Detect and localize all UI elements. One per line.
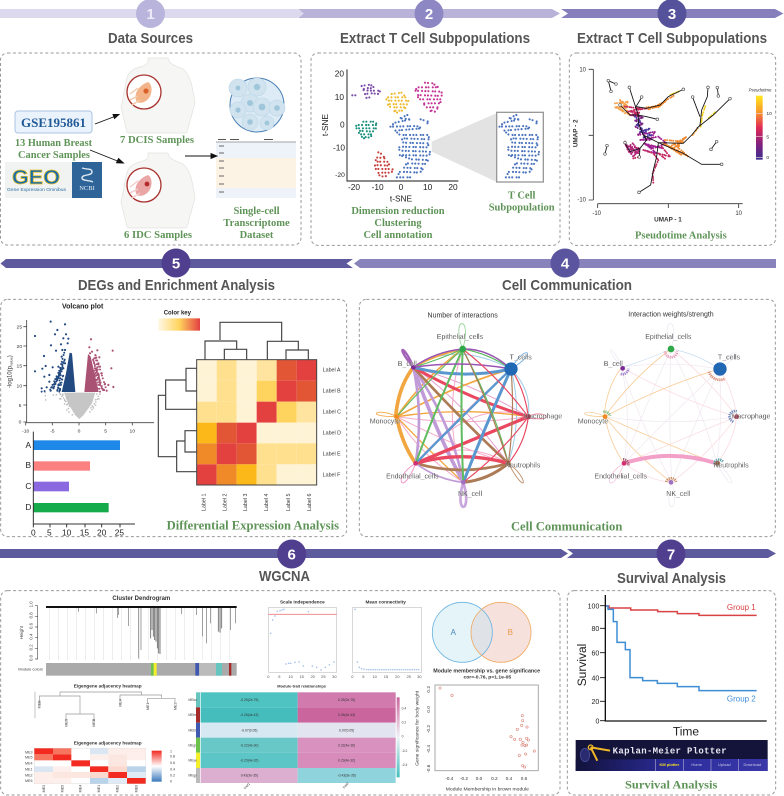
network: number of interactions: Epithelial_cells <box>437 334 484 341</box>
step badge 1 <box>136 0 165 28</box>
step badge 2 <box>414 0 444 28</box>
chart: mean connectivity: Mean connectivity <box>365 600 406 605</box>
cluster dendrogram: 0.6 <box>29 622 34 629</box>
heatmap: Label 6 <box>307 493 313 511</box>
chart: mean connectivity: 5 <box>362 674 365 679</box>
eigengene adjacency heatmap: ME2 <box>116 785 120 792</box>
volcano plot: 5 <box>104 428 107 434</box>
zoom wedge <box>432 113 496 182</box>
module-trait relationships heatmap: 0.26(4e-43) <box>338 713 355 717</box>
module membership scatter plot: -0.4 <box>445 776 454 781</box>
eigengene adjacency heatmap: 0.4 <box>170 767 175 771</box>
Kaplan-Meier Plotter banner: Download <box>743 762 761 767</box>
heatmap: Label 1 <box>202 493 208 511</box>
volcano plot: ) <box>7 355 13 357</box>
t-SNE axes: t-SNE <box>390 193 413 203</box>
arrows between data source and samples <box>90 114 217 163</box>
panel: t-SNE clustering <box>311 53 560 245</box>
heatmap: Label A <box>323 367 341 373</box>
Kaplan-Meier curves: 80 <box>592 626 599 633</box>
chart: scale independence: 0 <box>267 674 270 679</box>
pseudotime cells <box>615 92 715 183</box>
UMAP axes: -10 <box>577 197 587 203</box>
cluster dendrogram: 0.2 <box>29 644 34 650</box>
chart: scale independence: Scale independence <box>280 600 325 605</box>
t-SNE axes: -20 <box>335 172 345 179</box>
network: interaction weights and strength: Interaction weights/strength <box>628 312 714 319</box>
t-SNE axes: 20 <box>448 182 458 192</box>
step badge 4 <box>550 248 580 278</box>
module membership scatter plot: Module membership vs. gene significance <box>433 668 540 674</box>
module-trait relationships heatmap: -0.25(2e-75) <box>240 698 258 702</box>
module-trait relationships heatmap: -0.07(0.05) <box>241 728 257 732</box>
module membership scatter plot: 0.0 <box>426 706 431 713</box>
label: dimension reduction, clustering, cell annotation: Dimension reduction <box>351 206 445 217</box>
step badge 4: 4 <box>561 256 570 272</box>
eigengene adjacency heatmap: ME4 <box>79 785 83 792</box>
t-SNE axes: -20 <box>348 182 360 192</box>
bar chart: 25 <box>115 527 124 537</box>
panel: survival analysis <box>567 591 776 795</box>
Kaplan-Meier curves: 0 <box>595 718 599 725</box>
volcano plot: 20 <box>17 344 22 350</box>
icon: cell culture dish <box>229 78 285 132</box>
label: differential expression analysis: Differential Expression Analysis <box>167 518 339 532</box>
network: number of interactions: Macrophage <box>523 414 562 421</box>
eigengene adjacency heatmap: 0.8 <box>170 755 175 759</box>
heading: WGCNA: WGCNA <box>259 568 310 585</box>
label: T cell subpopulation: T Cell <box>508 190 535 201</box>
chart: scale independence: 20 <box>310 674 316 679</box>
label: survival analysis: Survival Analysis <box>625 778 718 792</box>
t-SNE axes: 0 <box>399 182 404 192</box>
network: number of interactions: NK_cell <box>458 491 482 498</box>
chart: mean connectivity: 25 <box>406 674 412 679</box>
bar chart: 5 <box>47 527 52 537</box>
step badge 7: 7 <box>667 546 675 564</box>
Kaplan-Meier curves: 100 <box>588 603 599 610</box>
heading: Data Sources: Data Sources <box>108 30 193 47</box>
cluster dendrogram: 0.0 <box>29 654 34 661</box>
pseudotime colour bar: Pseudotime <box>749 87 772 92</box>
eigengene adjacency heatmap: ME4 <box>25 761 33 765</box>
label: 7 DCIS samples: 7 DCIS Samples <box>120 135 194 146</box>
network: number of interactions: Monocyte <box>370 419 400 426</box>
eigengene adjacency heatmap: ME1 <box>97 785 101 792</box>
cluster dendrogram: 1.0 <box>29 601 34 607</box>
heading: DEGs and enrichment analysis: DEGs and Enrichment Analysis <box>78 277 275 294</box>
eigengene adjacency heatmap: 0.6 <box>170 761 175 765</box>
chart: mean connectivity <box>351 600 422 679</box>
network: number of interactions <box>370 313 562 507</box>
module membership scatter plot: Gene significance for body weight <box>415 690 421 766</box>
label: single-cell transcriptome dataset: Dataset <box>240 230 274 241</box>
bar chart: 0 <box>31 527 36 537</box>
step banner row 2 <box>0 259 776 268</box>
heatmap: Label 3 <box>243 493 249 511</box>
module membership scatter plot: -0.2 <box>426 725 431 733</box>
data source box: GSE195861 <box>15 111 92 133</box>
trajectory graph <box>605 81 730 192</box>
eigengene dendrogram: Eigengene adjacency heatmap <box>74 683 142 688</box>
bar chart: B <box>26 460 32 470</box>
volcano plot: value <box>9 357 13 366</box>
network: interaction weights and strength: Epithelial_cells <box>645 334 692 341</box>
pseudotime colour bar <box>749 87 772 161</box>
heatmap: Label 2 <box>222 493 228 511</box>
step badge 5: 5 <box>172 256 180 272</box>
volcano plot: 0 <box>78 428 81 434</box>
chart: mean connectivity: 30 <box>417 674 422 679</box>
module-trait relationships heatmap: MEbl <box>188 728 196 732</box>
chart: scale independence: 5 <box>278 674 281 679</box>
venn diagram <box>432 602 531 662</box>
volcano plot: 15 <box>17 364 22 370</box>
panel: cell communication <box>359 299 775 537</box>
module-trait relationships heatmap: -0.23(4e-32) <box>240 758 258 762</box>
network: interaction weights and strength: Endothelial_cells <box>594 473 647 480</box>
label: 13 human breast cancer samples: 13 Human Breast <box>15 138 92 149</box>
bar chart: 10 <box>62 527 72 537</box>
pseudotime colour bar: 5 <box>766 134 769 140</box>
chart: mean connectivity: 20 <box>395 674 400 679</box>
chart: mean connectivity: 10 <box>372 674 378 679</box>
t-SNE clusters <box>352 83 442 177</box>
module-trait relationships heatmap: 0 <box>402 735 404 739</box>
eigengene dendrogram <box>35 683 177 727</box>
module membership scatter plot: 0.0 <box>476 776 483 781</box>
UMAP axes: 10 <box>579 67 587 73</box>
module-trait relationships heatmap: -0.22(4e-30) <box>240 743 258 747</box>
cluster dendrogram: 0.8 <box>29 612 34 618</box>
Kaplan-Meier curves <box>575 595 767 738</box>
pseudotime colour bar: 10 <box>766 111 772 117</box>
heatmap: Label C <box>323 409 341 415</box>
module-trait relationships heatmap: -0.26(4e-43) <box>240 713 258 717</box>
volcano plot: Volcano plot <box>62 304 104 311</box>
module-trait relationships heatmap: -0.43(3e-35) <box>337 773 356 777</box>
step badge 7 <box>656 540 686 568</box>
module membership scatter plot: 0.2 <box>491 776 498 781</box>
network: interaction weights and strength: T_cells <box>718 354 741 361</box>
step banner row 3 <box>0 549 776 558</box>
module-trait relationships heatmap: 0.07(0.05) <box>339 728 354 732</box>
module membership scatter plot: 0.6 <box>521 776 528 781</box>
heatmap: Label 5 <box>286 493 292 511</box>
chart: scale independence: 25 <box>321 674 326 679</box>
Kaplan-Meier curves: 60 <box>592 650 599 657</box>
label: pseudotime analysis: Pseudotime Analysis <box>635 230 727 241</box>
eigengene adjacency heatmap: 0.2 <box>170 773 175 777</box>
module membership scatter plot: 0.4 <box>506 776 513 781</box>
eigengene dendrogram: MEB <box>38 700 42 708</box>
UMAP axes: -10 <box>592 211 602 217</box>
T cell subpopulation inset <box>497 112 543 182</box>
row dendrogram <box>158 368 197 472</box>
eigengene dendrogram: MEA <box>118 698 122 707</box>
column dendrogram <box>205 322 308 359</box>
module membership scatter plot: cor=-0.76, p=1.1e-05 <box>463 674 511 680</box>
step badge 2: 2 <box>425 6 433 23</box>
module-trait relationships heatmap: Module-trait relationships <box>277 684 327 689</box>
network: number of interactions: Endothelial_cells <box>386 473 439 480</box>
t-SNE axes: -10 <box>372 182 384 192</box>
t-SNE axes: t-SNE <box>320 113 330 136</box>
label: single-cell transcriptome dataset: Transcriptome <box>223 218 290 229</box>
heatmap: Label B <box>323 388 341 394</box>
eigengene adjacency heatmap: ME2 <box>25 773 33 777</box>
label: T cell subpopulation: Subpopulation <box>489 203 555 214</box>
label: 13 human breast cancer samples: Cancer Samples <box>18 150 90 161</box>
label: single-cell transcriptome dataset <box>223 206 290 241</box>
heading: cell communication: Cell Communication <box>502 277 632 294</box>
step badge 6 <box>277 540 306 568</box>
UMAP axes: UMAP - 2 <box>572 119 579 147</box>
label: cell communication: Cell Communication <box>511 520 622 534</box>
module-trait relationships heatmap: 0.25(2e-75) <box>338 698 355 702</box>
module membership scatter plot: -0.4 <box>426 745 431 753</box>
panel: pseudotime analysis <box>569 53 776 245</box>
t-SNE axes: 0 <box>340 120 345 130</box>
icon: torso with IDC breast <box>121 153 195 228</box>
pseudotime colour bar: 0 <box>766 155 769 161</box>
eigengene dendrogram: ME2 <box>173 702 177 710</box>
t-SNE axes: 20 <box>335 69 344 79</box>
module-trait relationships heatmap: 0.22(4e-30) <box>338 743 355 747</box>
module-trait relationships heatmap: -0.2 <box>402 749 408 753</box>
venn diagram: A <box>451 628 457 637</box>
network: number of interactions: Number of interactions <box>428 313 498 320</box>
module membership scatter plot <box>415 668 540 793</box>
network: interaction weights and strength <box>578 312 771 507</box>
label: 13 human breast cancer samples <box>15 138 92 161</box>
heatmap: Label E <box>323 452 341 458</box>
bar chart <box>25 432 135 537</box>
chart: mean connectivity: 15 <box>384 674 389 679</box>
label: 6 IDC samples: 6 IDC Samples <box>124 230 192 241</box>
eigengene adjacency heatmap <box>25 741 175 792</box>
Kaplan-Meier curves: Group 1 <box>727 603 756 612</box>
step badge 5 <box>162 248 190 278</box>
venn diagram: B <box>508 628 513 637</box>
t-SNE axes: 10 <box>335 92 344 102</box>
volcano plot: 0 <box>19 420 22 426</box>
eigengene adjacency heatmap: ME5 <box>25 756 33 760</box>
logo: NCBI <box>72 162 102 198</box>
step banner row 1 <box>0 9 784 18</box>
cluster dendrogram: 0.4 <box>29 633 34 640</box>
Kaplan-Meier curves: Group 2 <box>727 695 756 704</box>
dataset table <box>216 140 296 198</box>
module membership scatter plot: -0.6 <box>426 764 431 773</box>
network: number of interactions: Neutrophils <box>505 462 541 469</box>
step badge 3 <box>658 0 686 28</box>
module-trait relationships heatmap: 0.23(4e-32) <box>338 758 355 762</box>
module membership scatter plot: Module Membership in brown module <box>446 787 529 793</box>
module-trait relationships heatmap <box>188 684 408 790</box>
module-trait relationships heatmap: MEgy <box>188 773 197 777</box>
volcano plot <box>7 304 154 434</box>
eigengene adjacency heatmap: ME6 <box>134 785 138 792</box>
bar chart: 15 <box>80 527 89 537</box>
network: number of interactions: B_cell <box>398 361 417 368</box>
Kaplan-Meier Plotter banner <box>576 740 768 771</box>
Kaplan-Meier curves: 40 <box>592 675 599 682</box>
label: single-cell transcriptome dataset: Single-cell <box>233 206 280 217</box>
panel: WGCNA <box>1 591 560 795</box>
panel: data sources <box>0 53 301 245</box>
network: interaction weights and strength: NK_cell <box>666 491 691 498</box>
step badge 3: 3 <box>668 6 676 23</box>
chart: scale independence: 15 <box>299 674 305 679</box>
eigengene adjacency heatmap: 1 <box>170 749 172 753</box>
volcano plot: -5 <box>50 428 55 434</box>
network: number of interactions: T_cells <box>510 354 532 361</box>
Kaplan-Meier Plotter banner: Home <box>691 762 703 767</box>
label: dimension reduction, clustering, cell annotation <box>351 206 445 241</box>
eigengene dendrogram: MES <box>64 718 68 727</box>
Kaplan-Meier Plotter banner: Upload <box>718 762 731 767</box>
module-trait relationships heatmap: MEbr <box>188 713 197 717</box>
module-trait relationships heatmap: trait2 <box>342 781 350 789</box>
heading: survival analysis: Survival Analysis <box>617 570 726 587</box>
logo: GEO: GEO <box>12 167 60 189</box>
panel: DEGs and enrichment analysis <box>1 299 347 537</box>
eigengene dendrogram: MEB <box>92 718 96 727</box>
chart: scale independence: 10 <box>288 674 294 679</box>
logo: NCBI: NCBI <box>79 185 95 192</box>
eigengene adjacency heatmap: 0 <box>170 779 172 783</box>
trajectory end nodes <box>604 79 731 194</box>
module membership scatter plot: 0.2 <box>426 686 431 693</box>
logo: GEO: Gene Expression Omnibus <box>7 187 66 192</box>
eigengene adjacency heatmap: ME3 <box>25 750 33 754</box>
network: interaction weights and strength: Macrophage <box>732 414 771 421</box>
Kaplan-Meier Plotter banner: Kaplan-Meier Plotter <box>613 746 727 756</box>
bar chart: C <box>25 481 31 491</box>
eigengene adjacency heatmap: ME6 <box>25 779 33 783</box>
volcano plot: 10 <box>130 428 135 434</box>
colour key <box>158 310 200 331</box>
module-trait relationships heatmap: MEgr <box>188 743 197 747</box>
Kaplan-Meier Plotter banner: KM plotter <box>659 762 680 767</box>
module-trait relationships heatmap: 0.43(3e-35) <box>241 773 258 777</box>
label: dimension reduction, clustering, cell annotation: Cell annotation <box>363 230 433 241</box>
logo: GEO <box>5 162 72 198</box>
label: dimension reduction, clustering, cell annotation: Clustering <box>374 218 422 229</box>
module-trait relationships heatmap: 0.2 <box>402 721 406 725</box>
module membership scatter plot: -0.2 <box>460 776 468 781</box>
module-trait relationships heatmap: MEye <box>188 758 197 762</box>
module-trait relationships heatmap: trait1 <box>243 782 251 790</box>
step badge 1: 1 <box>146 6 155 23</box>
module-trait relationships heatmap: MEtur <box>188 698 198 702</box>
heatmap <box>197 360 341 511</box>
t-SNE axes <box>320 69 458 203</box>
network: interaction weights and strength: Neutrophils <box>713 462 749 469</box>
cluster dendrogram <box>18 596 237 676</box>
volcano plot: 25 <box>17 325 22 331</box>
data source box: GSE195861: GSE195861 <box>21 115 86 130</box>
volcano plot: -10 <box>22 428 29 434</box>
Kaplan-Meier curves: Survival <box>575 644 589 686</box>
cluster dendrogram: Cluster Dendrogram <box>112 596 170 602</box>
heatmap: Label D <box>323 430 341 436</box>
bar chart: D <box>25 502 31 512</box>
heatmap: Label 4 <box>264 493 270 511</box>
cluster dendrogram: Height <box>19 625 24 639</box>
eigengene adjacency heatmap: Eigengene adjacency heatmap <box>74 741 142 746</box>
heatmap: Label F <box>323 473 341 479</box>
eigengene adjacency heatmap: ME3 <box>42 785 46 792</box>
chart: mean connectivity: 0 <box>351 674 354 679</box>
t-SNE axes: 10 <box>423 182 433 192</box>
Kaplan-Meier curves: Time <box>673 724 699 738</box>
eigengene adjacency heatmap: ME1 <box>25 767 33 771</box>
Kaplan-Meier curves: 20 <box>592 699 599 706</box>
icon: torso with DCIS breast <box>121 58 195 133</box>
UMAP axes: 10 <box>735 211 743 217</box>
UMAP axes <box>572 67 743 223</box>
colour key: Color key <box>164 310 192 316</box>
volcano plot: 10 <box>17 384 22 390</box>
label: T cell subpopulation <box>489 190 555 214</box>
module-trait relationships heatmap: 0.4 <box>402 706 406 710</box>
heading: Extract T Cell Subpopulations (step 3): Extract T Cell Subpopulations <box>577 30 767 47</box>
chart: scale independence <box>267 600 337 679</box>
chart: scale independence: 30 <box>332 674 337 679</box>
volcano plot: -log10(p <box>7 366 13 388</box>
bar chart: 20 <box>97 527 107 537</box>
step badge 6: 6 <box>288 546 296 564</box>
module-trait relationships heatmap: -0.4 <box>402 763 408 767</box>
cluster dendrogram: Module colors <box>18 667 43 672</box>
UMAP axes: UMAP - 1 <box>654 216 682 223</box>
eigengene adjacency heatmap: ME5 <box>60 785 64 792</box>
t-SNE axes: -10 <box>333 143 345 153</box>
heading: Extract T Cell Subpopulations (step 2): Extract T Cell Subpopulations <box>340 30 530 47</box>
eigengene dendrogram: ME1 <box>146 702 150 710</box>
network: interaction weights and strength: B_cell <box>604 361 623 368</box>
volcano plot: 5 <box>19 403 22 409</box>
bar chart: A <box>26 440 32 450</box>
network: interaction weights and strength: Monocyte <box>578 419 608 426</box>
